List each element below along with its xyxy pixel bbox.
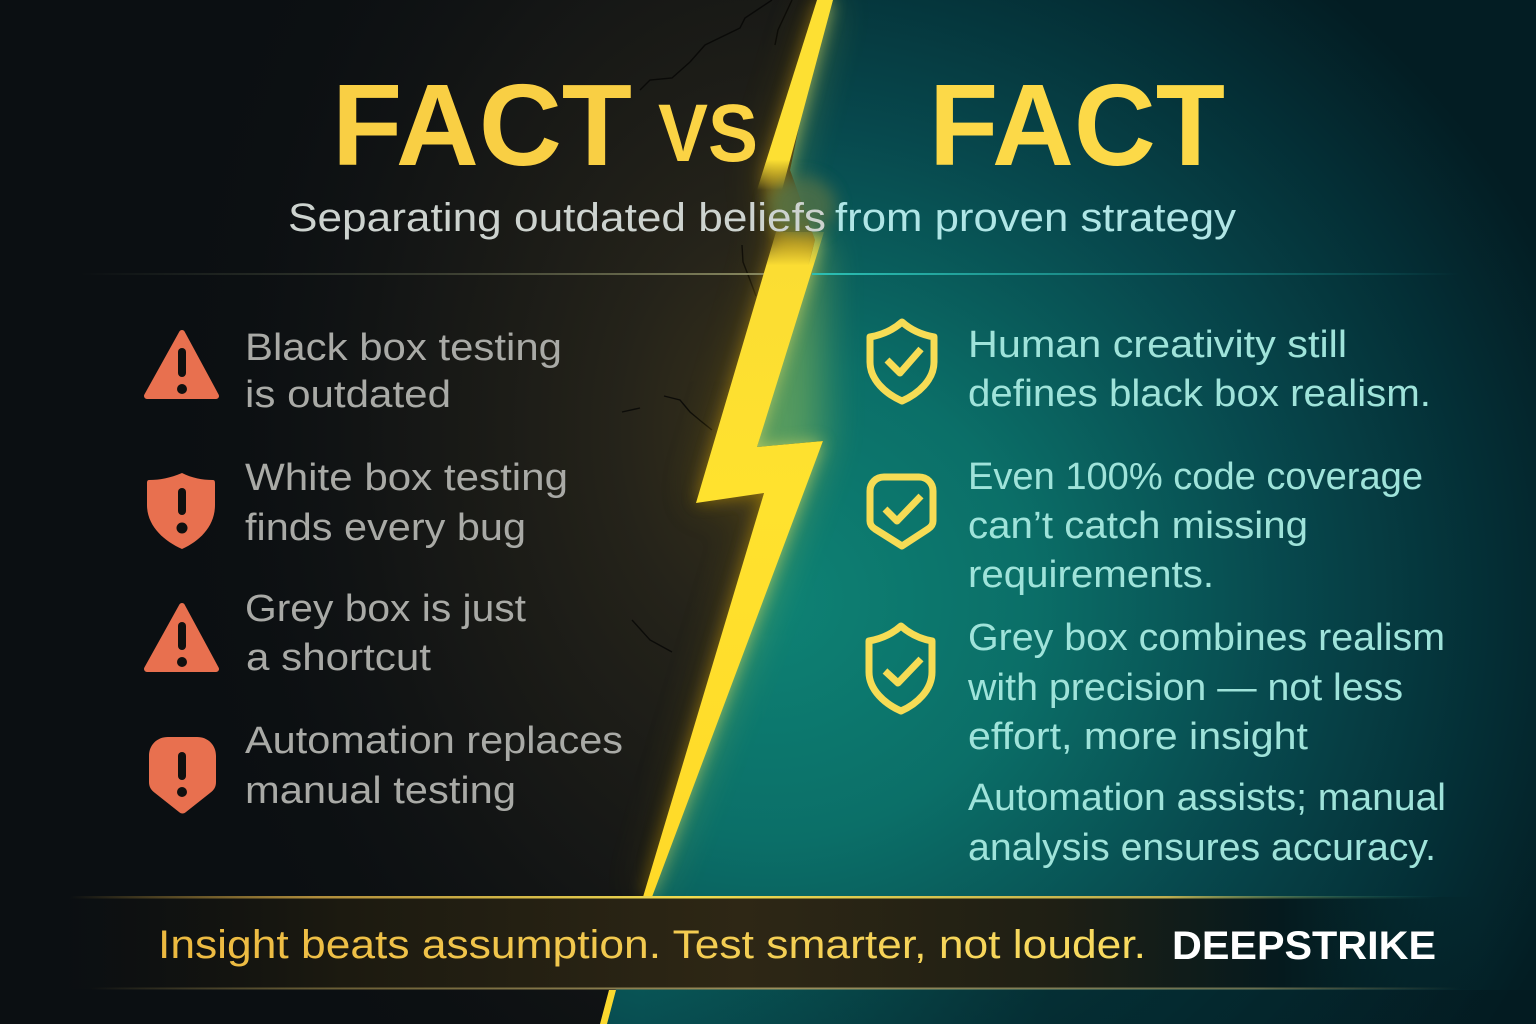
banner top rule bbox=[70, 896, 1440, 898]
text: white box myth: finds every bug bbox=[245, 507, 526, 549]
fact 4: automation text: Automation assists; manual bbox=[968, 777, 1446, 819]
title bbox=[332, 60, 1225, 190]
text: code coverage: can’t catch missing bbox=[968, 505, 1308, 547]
text: human creativity bbox=[968, 324, 1431, 415]
text: code coverage: Even 100% code coverage bbox=[968, 456, 1423, 498]
icon: warning triangle bbox=[147, 333, 216, 396]
banner background bbox=[60, 897, 1480, 989]
text: grey box fact: effort, more insight bbox=[968, 716, 1308, 758]
text: grey box myth: a shortcut bbox=[246, 637, 431, 679]
tagline: Insight beats assumption. Test smarter, not louder. bbox=[158, 923, 1146, 967]
text: grey box fact bbox=[967, 617, 1445, 758]
lightning glow, left side bbox=[643, 0, 833, 895]
background: teal right side bbox=[607, 0, 1536, 1024]
text: white box myth bbox=[245, 457, 568, 549]
subtitle bbox=[288, 196, 1236, 240]
panel: myths bbox=[147, 327, 623, 814]
text: code coverage bbox=[968, 456, 1423, 596]
text: white box myth: White box testing bbox=[245, 457, 568, 499]
panel: facts bbox=[869, 322, 1446, 869]
text: black box myth: Black box testing bbox=[245, 327, 562, 369]
fact 4: automation text: analysis ensures accuracy. bbox=[968, 827, 1436, 869]
title: FACT bbox=[332, 60, 632, 190]
icon: warning badge bbox=[149, 737, 216, 814]
text: automation myth bbox=[245, 720, 623, 812]
text: automation myth: Automation replaces bbox=[245, 720, 623, 762]
text: human creativity: Human creativity still bbox=[968, 324, 1347, 366]
title: VS bbox=[658, 88, 758, 179]
icon: warning shield bbox=[147, 473, 215, 549]
brand name: DEEPSTRIKE bbox=[1172, 924, 1436, 968]
text: grey box fact: with precision — not less bbox=[967, 667, 1403, 709]
text: automation myth: manual testing bbox=[245, 770, 516, 812]
text: grey box myth bbox=[245, 588, 526, 679]
banner bbox=[60, 896, 1480, 990]
lightning glow, right side bbox=[643, 0, 833, 895]
myth 1 bbox=[147, 327, 562, 416]
myth 4 bbox=[149, 720, 623, 814]
subtitle: from proven strategy bbox=[835, 196, 1236, 240]
myth 3 bbox=[147, 588, 526, 679]
title: FACT bbox=[929, 60, 1225, 190]
text: black box myth: is outdated bbox=[245, 374, 451, 416]
wall cracks bbox=[622, 0, 792, 652]
icon: warning triangle bbox=[147, 606, 216, 669]
text: code coverage: requirements. bbox=[968, 554, 1214, 596]
text: human creativity: defines black box realism. bbox=[968, 373, 1431, 415]
fact 2 bbox=[870, 456, 1423, 596]
text: grey box myth: Grey box is just bbox=[245, 588, 526, 630]
text: black box myth bbox=[245, 327, 562, 416]
divider line left bbox=[80, 273, 770, 275]
text: grey box fact: Grey box combines realism bbox=[968, 617, 1445, 659]
banner bottom rule bbox=[90, 988, 1460, 990]
lightning bolt bbox=[600, 0, 833, 1024]
myth 2 bbox=[147, 457, 568, 549]
icon: check shield bbox=[870, 322, 934, 401]
subtitle: Separating outdated beliefs bbox=[288, 196, 826, 240]
background: shade below banner bbox=[739, 990, 1424, 1024]
fact 4: automation text bbox=[968, 777, 1446, 869]
glow patch behind subtitle bbox=[768, 176, 836, 236]
icon: check shield bbox=[869, 626, 932, 711]
icon: check badge bbox=[870, 477, 933, 546]
fact 3 bbox=[869, 617, 1445, 758]
background: warm glow on left side bbox=[378, 0, 817, 896]
divider line right bbox=[812, 273, 1460, 275]
fact 1 bbox=[870, 322, 1431, 415]
